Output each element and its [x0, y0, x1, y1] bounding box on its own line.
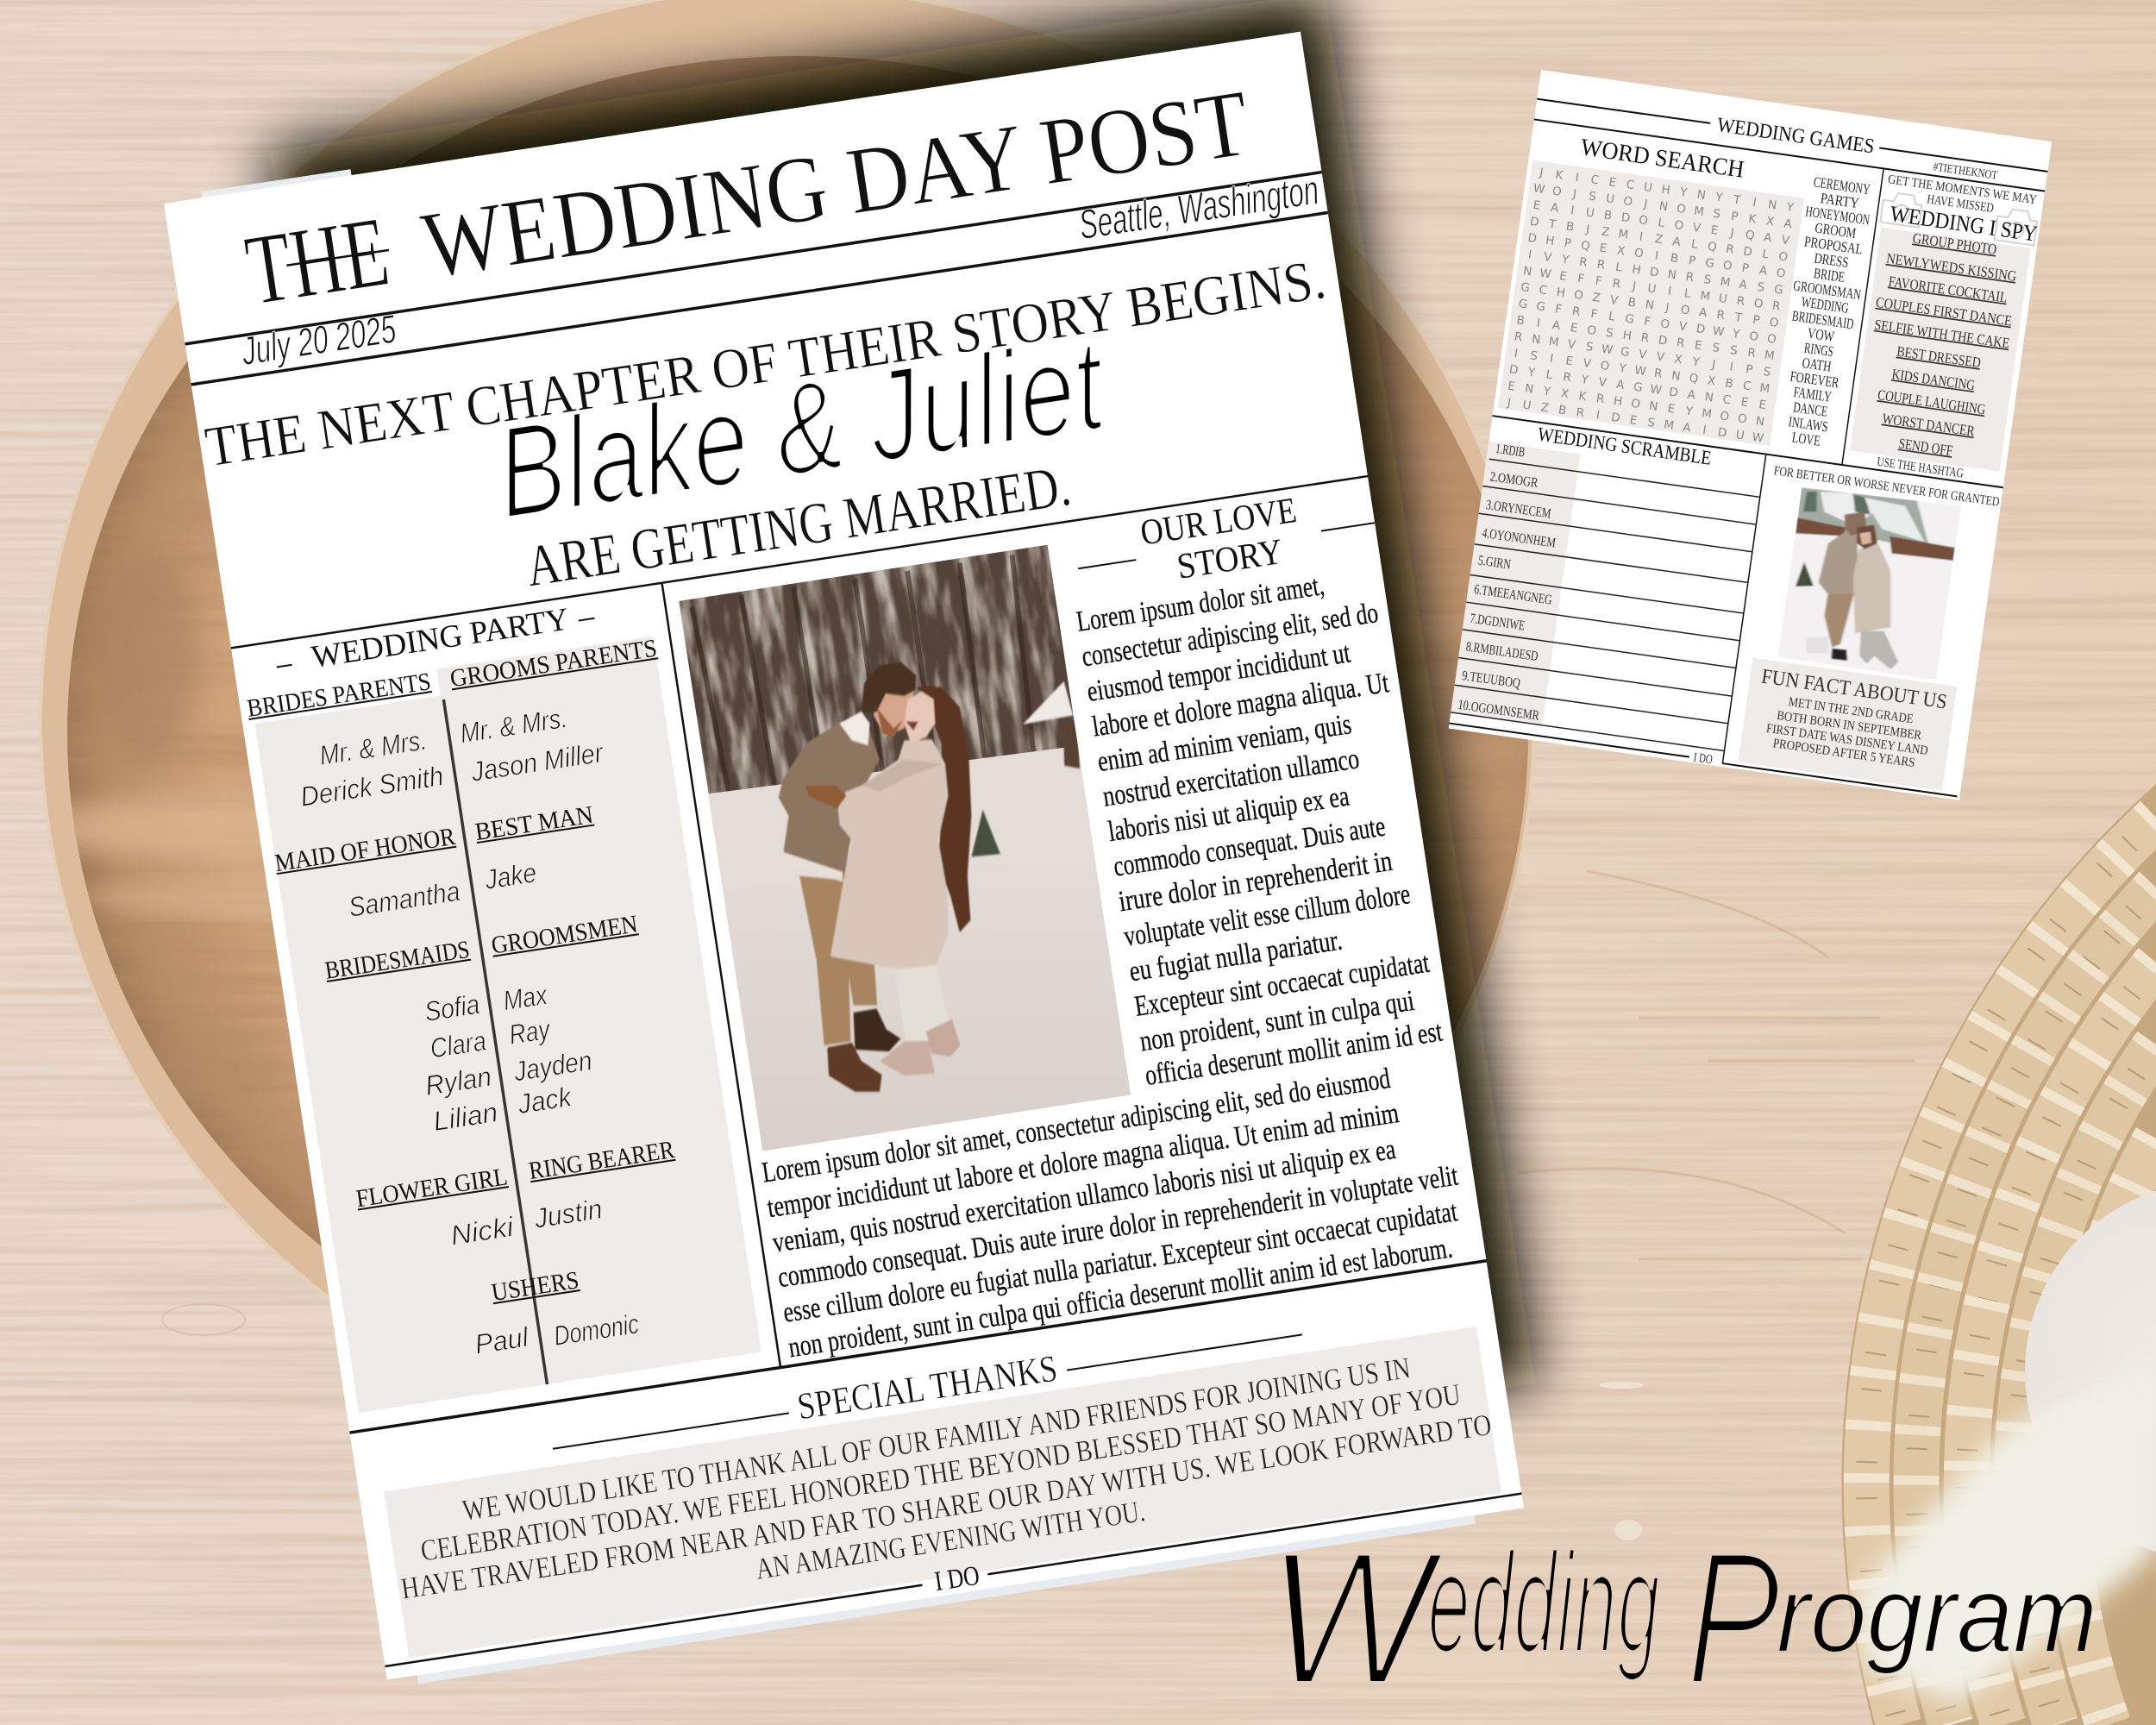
letter grid: DHPQEXOIBPGOPAO	[1526, 231, 1786, 281]
panel: wedding i spy: GET THE MOMENTS WE MAY	[1887, 172, 2038, 207]
panel: wedding i spy: HAVE MISSED	[1926, 192, 1995, 216]
letter grid: JUZBRIDESMAIDUW	[1506, 396, 1764, 446]
text block: full-width story	[760, 1055, 1471, 1364]
woman's long hair	[919, 687, 971, 932]
blurred feather plume	[1854, 1358, 2156, 1703]
text block: love story column: labore et dolore magna aliqua. Ut	[1090, 667, 1391, 743]
text block: love story column: voluptate velit esse cillum dolore	[1122, 878, 1413, 953]
scrambled words: 7.DGDNIWE	[1469, 612, 1526, 634]
panel: wedding i spy: USE THE HASHTAG	[1876, 455, 1965, 481]
word list	[1771, 172, 1877, 452]
panel: wedding party	[239, 589, 763, 1414]
word list: DRESS	[1813, 250, 1850, 271]
page sheet	[164, 32, 1524, 1680]
man head	[874, 689, 915, 737]
icon: camera right	[1995, 207, 2039, 245]
letter grid: NWEFFRJUILMUROR	[1522, 264, 1781, 314]
text block: love story column: non proident, sunt in culpa qui	[1138, 985, 1416, 1057]
man trousers	[799, 876, 877, 1045]
word list: GROOMSMAN	[1792, 277, 1862, 303]
headline: ARE GETTING MARRIED.	[522, 452, 1075, 599]
woman head	[916, 686, 943, 724]
word list: OATH	[1801, 354, 1833, 375]
word list: FAMILY	[1793, 384, 1833, 405]
panel: fun fact about us: FUN FACT ABOUT US	[1760, 666, 1948, 713]
party names: Derick Smith	[298, 760, 445, 812]
man jacket	[1819, 529, 1858, 594]
spy list: COUPLES FIRST DANCE	[1875, 294, 2013, 329]
text block: love story column: enim ad minim veniam, quis	[1095, 708, 1353, 778]
party names: Nicki	[448, 1211, 516, 1251]
word list: PARTY	[1820, 190, 1860, 211]
panel: fun fact about us: PROPOSED AFTER 5 YEARS	[1772, 737, 1915, 770]
spy list: SELFIE WITH THE CAKE	[1873, 317, 2010, 352]
panel: wedding scramble	[1448, 417, 1765, 768]
word list: PROPOSAL	[1803, 233, 1864, 258]
party names: Jack	[515, 1081, 575, 1120]
party names: Ray	[507, 1013, 553, 1051]
woman coat	[830, 739, 948, 969]
word list: LOVE	[1791, 429, 1821, 449]
masthead: THE	[239, 197, 396, 327]
panel: word search	[1498, 128, 1877, 456]
icon: camera left	[1880, 191, 1923, 228]
panel: special thanks: HAVE TRAVELED FROM NEAR AND FAR TO SHARE OUR DAY WITH US. WE LOOK FORWARD TO	[398, 1408, 1494, 1606]
grid background	[1498, 160, 1804, 446]
text block: full-width story: esse cillum dolore eu fugiat nulla pariatur. Excepteur sint occaecat cupidatat	[781, 1195, 1460, 1329]
panel: special thanks: WE WOULD LIKE TO THANK ALL OF OUR FAMILY AND FRIENDS FOR JOINING US IN	[461, 1351, 1413, 1527]
small page: wedding games	[1448, 70, 2052, 802]
panel: special thanks: CELEBRATION TODAY. WE FEEL HONORED THE BEYOND BLESSED THAT SO MANY OF YOU	[418, 1377, 1463, 1568]
panel: fun fact about us: FIRST DATE WAS DISNEY LAND	[1765, 722, 1929, 758]
wooden plate	[39, 0, 1532, 1298]
small tree	[971, 810, 1000, 856]
heading: word search: WORD SEARCH	[1579, 134, 1745, 184]
woman tights	[895, 966, 949, 1050]
heading: wedding party: WEDDING PARTY	[310, 601, 571, 675]
panel: special thanks: AN AMAZING EVENING WITH YOU.	[754, 1494, 1147, 1586]
role labels: GROOMS PARENTS	[448, 635, 659, 693]
tagline: FOR BETTER OR WORSE NEVER FOR GRANTED	[1773, 464, 2001, 510]
heading: our love story	[1071, 480, 1380, 602]
spy list: BEST DRESSED	[1896, 343, 1982, 371]
panel: wedding i spy: WEDDING I SPY	[1889, 201, 2039, 247]
role labels: BEST MAN	[473, 801, 595, 846]
headline: THE NEXT CHAPTER OF THEIR STORY BEGINS.	[201, 248, 1330, 479]
letter grid: GGFRFLGFOVDWYOO	[1518, 297, 1777, 347]
answer lines	[1451, 458, 1760, 751]
photo: couple with ice skates	[1771, 483, 1971, 684]
footer rule with I DO	[382, 1477, 1524, 1680]
title: wedding program script: P	[1686, 1512, 1781, 1724]
heading: wedding games: WEDDING GAMES	[1715, 114, 1876, 159]
text block: love story column	[1075, 561, 1445, 1092]
boots	[854, 1008, 900, 1051]
title: wedding program script: W	[1268, 1512, 1445, 1724]
centre divider	[442, 699, 548, 1384]
party names: Paul	[473, 1321, 531, 1360]
text block: love story column: laboris nisi ut aliquip ex ea	[1106, 780, 1351, 848]
main page shadow	[269, 0, 1535, 1543]
text block: love story column: eu fugiat nulla pariatur.	[1127, 925, 1344, 988]
man trousers	[1824, 593, 1854, 648]
photo: couple in the snow	[679, 545, 1131, 1151]
word list: VOW	[1807, 325, 1836, 345]
panel: wedding i spy	[1846, 154, 2046, 486]
header rules	[1449, 98, 2048, 798]
headline: Blake & Juliet	[487, 310, 1116, 546]
spy list: WORST DANCER	[1881, 411, 1976, 440]
word list: WEDDING	[1801, 293, 1850, 317]
scrambled words: 6.TMEEANGNEG	[1473, 582, 1553, 608]
text block: full-width story: commodo consequat. Duis aute irure dolor in reprehenderit in voluptate velit	[776, 1159, 1461, 1294]
scrambled words	[1457, 442, 1576, 724]
masthead	[239, 66, 1256, 327]
scrambled words: 3.ORYNECEM	[1485, 498, 1552, 522]
rattan basket	[1841, 784, 2156, 1725]
word list: RINGS	[1803, 340, 1834, 360]
text block: love story column: Excepteur sint occaecat cupidatat	[1132, 947, 1432, 1023]
letter grid: ISIEVOYWRNQXBCM	[1514, 347, 1771, 396]
word list: INLAWS	[1788, 413, 1829, 436]
word list: HONEYMOON	[1804, 203, 1871, 229]
role labels: BRIDES PARENTS	[245, 668, 433, 723]
role labels	[245, 634, 750, 1330]
party names: Clara	[428, 1025, 488, 1064]
letter grid: EAIUBDOLOVEJQAV	[1532, 198, 1791, 248]
spy list: FAVORITE COCKTAIL	[1888, 273, 2009, 306]
role labels: RING BEARER	[527, 1136, 677, 1185]
party names: Jayden	[511, 1044, 594, 1088]
letter grid: WOJSUOJNOMSPKXA	[1532, 181, 1794, 232]
man head	[1845, 511, 1866, 536]
white ball	[2025, 1182, 2156, 1561]
text block: love story column: consectetur adipiscing elit, sed do	[1080, 597, 1381, 674]
spy list: GROUP PHOTO	[1912, 229, 1997, 258]
word list: BRIDE	[1813, 265, 1846, 285]
woman boots	[926, 1019, 961, 1057]
second sheet behind	[193, 33, 1476, 1684]
letter grid: IVYRRLHDNRSMASG	[1527, 248, 1784, 298]
headline	[201, 248, 1354, 643]
text block: love story column: eiusmod tempor incididunt ut	[1085, 637, 1353, 708]
party names: Sofia	[423, 988, 482, 1027]
spy list	[1856, 226, 2023, 465]
woman coat	[1853, 543, 1890, 633]
spy list: COUPLE LAUGHING	[1877, 386, 1986, 417]
footer rule with I DO: I DO	[932, 1559, 981, 1596]
letter grid: ENYXKRHONEYMOON	[1507, 380, 1765, 429]
party names: Samantha	[347, 875, 462, 923]
scrambled words: 9.TEUUBOQ	[1461, 668, 1521, 692]
letter grid	[1502, 165, 1797, 446]
party names: Jason Miller	[468, 737, 606, 787]
letter grid: BIAEOSHRDRESSRM	[1516, 313, 1776, 363]
panel: fun fact about us	[1739, 658, 1957, 791]
spy list: NEWLYWEDS KISSING	[1885, 250, 2017, 285]
cabin fence	[1796, 518, 1846, 536]
heading: special thanks: SPECIAL THANKS	[794, 1347, 1060, 1428]
spy list: KIDS DANCING	[1891, 366, 1976, 393]
date and location band: July 20 2025	[238, 306, 399, 373]
scramble shade	[1451, 442, 1580, 725]
letter grid: DTBJZMIZALQRDLO	[1529, 215, 1789, 265]
text block: full-width story: non proident, sunt in culpa qui officia deserunt mollit anim id est laborum.	[787, 1232, 1455, 1364]
panel: wedding scramble: WEDDING SCRAMBLE	[1536, 423, 1713, 469]
text block: full-width story: Lorem ipsum dolor sit amet, consectetur adipiscing elit, sed do eiusmod	[760, 1063, 1392, 1189]
word list: CEREMONY	[1813, 173, 1871, 198]
games sheet	[1449, 70, 2052, 800]
forest	[679, 545, 1080, 794]
text block: love story column: nostrud exercitation ullamco	[1100, 743, 1362, 813]
heading: special thanks	[548, 1310, 1305, 1465]
letter grid: JKICECUHYNYTINY	[1538, 166, 1796, 215]
title: wedding program script: rogram	[1777, 1555, 2097, 1675]
date and location band	[184, 166, 1328, 386]
small tree	[1796, 562, 1814, 586]
heading: our love story: STORY	[1175, 532, 1285, 587]
title: wedding program script: edding	[1427, 1523, 1660, 1682]
scrambled words: 5.GIRN	[1477, 553, 1512, 573]
scrambled words: 1.RDIB	[1495, 442, 1526, 461]
word list: FOREVER	[1789, 368, 1840, 391]
text block: full-width story: veniam, quis nostrud exercitation ullamco laboris nisi ut aliquip ex ea	[770, 1133, 1398, 1259]
text block: love story column: officia deserunt mollit anim id est	[1143, 1015, 1445, 1092]
party names: Justin	[531, 1193, 605, 1234]
party names: Lilian	[431, 1096, 500, 1137]
snow ground	[664, 535, 1147, 1164]
party names	[292, 698, 692, 1377]
scrambled words: 8.RMBILADESD	[1465, 639, 1539, 664]
panel: fun fact about us: BOTH BORN IN SEPTEMBER	[1776, 709, 1922, 743]
main newspaper page	[163, 26, 1525, 1688]
scrambled words: 10.OGOMNSEMR	[1457, 698, 1540, 724]
title: wedding program script	[1268, 1512, 2097, 1724]
cabin	[1062, 719, 1080, 768]
word list: DANCE	[1792, 398, 1828, 420]
party background	[251, 637, 761, 1413]
party names: Domonic	[552, 1308, 641, 1352]
man jacket	[779, 715, 880, 880]
snowy trees	[1797, 487, 1928, 543]
panel: wedding scramble: I DO	[1693, 750, 1714, 767]
spy list: SEND OFF	[1897, 436, 1953, 459]
text block: love story column: irure dolor in reprehenderit in	[1117, 845, 1395, 918]
scrambled words: 4.OYONONHEM	[1481, 526, 1557, 551]
party names: Jake	[482, 856, 538, 895]
word list: BRIDESMAID	[1791, 307, 1855, 332]
masthead: WEDDING DAY POST	[416, 70, 1256, 298]
letter grid: DYLRYVAGWDANCEE	[1508, 362, 1767, 412]
scrambled words: 2.OMOGR	[1489, 469, 1539, 491]
text block: full-width story: tempor incididunt ut labore et dolore magna aliqua. Ut enim ad minim	[765, 1097, 1401, 1224]
party names: Mr. & Mrs.	[458, 702, 569, 749]
letter grid: RNMVSWGVVXYJIPS	[1514, 329, 1771, 380]
role labels: MAID OF HONOR	[273, 823, 458, 877]
date and location band: Seattle, Washington	[1076, 167, 1322, 248]
panel: wedding i spy: #TIETHEKNOT	[1933, 160, 1998, 183]
woman legs	[1859, 631, 1898, 669]
panel: fun fact about us: MET IN THE 2ND GRADE	[1788, 695, 1914, 726]
section rules	[231, 475, 1487, 1434]
panel: special thanks	[384, 1327, 1501, 1658]
glove	[805, 786, 846, 809]
heading: our love story: OUR LOVE	[1138, 491, 1299, 554]
role labels: GROOMSMEN	[490, 910, 640, 960]
role labels: BRIDESMAIDS	[323, 936, 472, 985]
word list: GROOM	[1814, 219, 1857, 242]
woman head	[1857, 524, 1877, 549]
text block: love story column: Lorem ipsum dolor sit amet,	[1075, 569, 1326, 638]
role labels: FLOWER GIRL	[354, 1163, 510, 1213]
spy list background	[1850, 228, 2031, 471]
role labels: USHERS	[490, 1266, 580, 1307]
text block: love story column: commodo consequat. Duis aute	[1112, 811, 1388, 883]
letter grid: GCHOZVBNJOARTPO	[1520, 280, 1779, 330]
party names: Rylan	[423, 1061, 493, 1101]
party names: Mr. & Mrs.	[317, 724, 429, 771]
party names: Max	[501, 979, 550, 1016]
